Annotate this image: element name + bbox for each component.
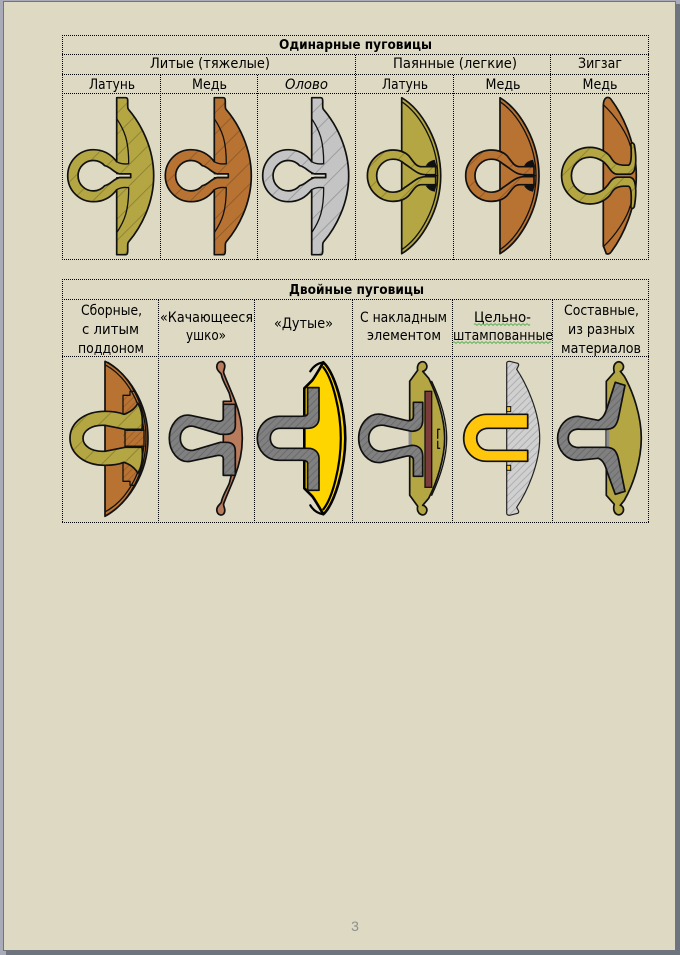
- table grid: double buttons: [62, 279, 649, 523]
- button: cast copper: [165, 98, 251, 255]
- header: overlay: С накладным: [360, 310, 447, 326]
- button: soldered brass: [367, 98, 441, 254]
- header: composite: Составные,: [564, 303, 639, 319]
- button: soldered copper: [466, 98, 539, 254]
- table: double buttons: [62, 279, 649, 523]
- header: composite: из разных: [568, 322, 635, 338]
- heading: double buttons: Двойные пуговицы: [289, 283, 424, 298]
- label: copper 3: Медь: [582, 77, 618, 93]
- header: composite: [561, 303, 641, 357]
- header: swinging loop: [160, 310, 253, 344]
- button: hollow: [257, 362, 345, 514]
- header: overlay: элементом: [367, 328, 441, 344]
- header: composite: материалов: [561, 341, 641, 357]
- label: copper 1: Медь: [192, 77, 227, 93]
- label: copper 2: Медь: [486, 77, 520, 93]
- button: assembled with cast base: [70, 361, 148, 516]
- button: cast brass: [68, 98, 154, 255]
- button: with overlay element: [359, 362, 447, 515]
- header: soldered: Паянные (легкие): [393, 56, 517, 72]
- heading: single buttons: Одинарные пуговицы: [279, 38, 432, 53]
- header: swinging loop: «Качающееся: [160, 310, 253, 326]
- header: one-piece stamped: штампованные: [453, 328, 553, 344]
- button: composite: [558, 362, 641, 515]
- button: cast tin: [263, 98, 349, 255]
- header: assembled: Сборные,: [81, 303, 142, 319]
- label: brass 2: Латунь: [382, 77, 428, 93]
- header: one-piece stamped: Цельно-: [474, 310, 531, 326]
- header: assembled: [78, 303, 144, 357]
- table: single buttons: [62, 35, 649, 260]
- button: one-piece stamped: [464, 361, 540, 515]
- table grid: single buttons: [62, 35, 649, 260]
- header: assembled: поддоном: [78, 341, 144, 357]
- header: overlay: [360, 310, 447, 344]
- button: zigzag copper with brass loop: [562, 97, 636, 254]
- header: one-piece stamped: [453, 310, 553, 344]
- header: hollow: «Дутые»: [274, 316, 333, 332]
- button: swinging loop: [169, 362, 242, 515]
- header: swinging loop: ушко»: [186, 328, 226, 344]
- label: tin: Олово: [285, 77, 328, 93]
- page number: 3: [351, 918, 359, 934]
- header: assembled: с литым: [82, 322, 139, 338]
- header: cast: Литые (тяжелые): [150, 56, 270, 72]
- label: brass 1: Латунь: [89, 77, 135, 93]
- header: zigzag: Зигзаг: [578, 56, 622, 72]
